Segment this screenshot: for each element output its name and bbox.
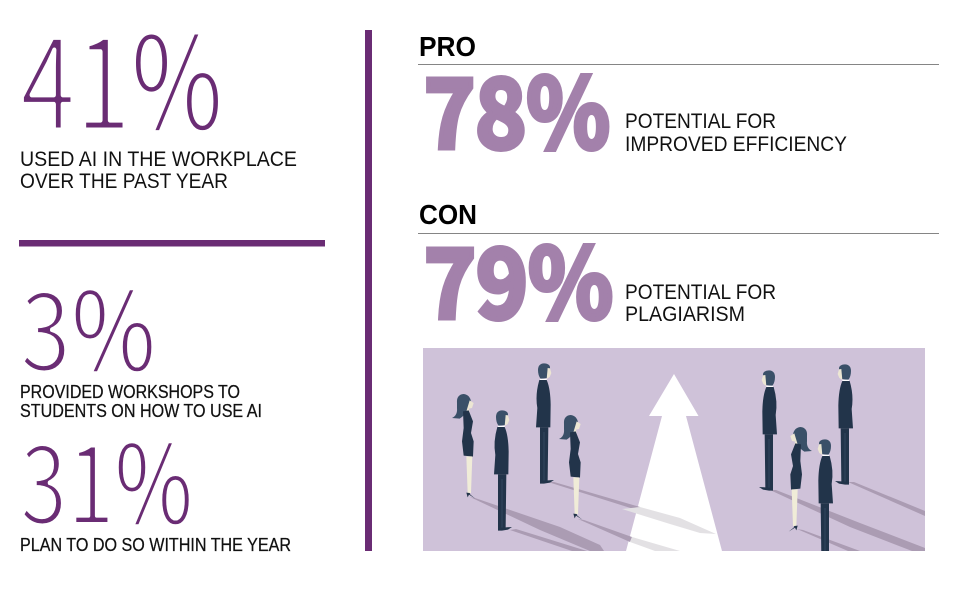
number: 3%: 3% (20, 243, 156, 403)
caption: provided workshops: STUDENTS ON HOW TO USE AI (20, 400, 262, 421)
number: 78%: 78% (424, 37, 610, 176)
vertical divider (365, 30, 372, 551)
panel: con (418, 199, 939, 346)
figure: man facing left (759, 370, 777, 491)
heading: PRO: PRO (419, 31, 476, 62)
stat: 3% provided workshops (20, 243, 262, 421)
panel: pro (418, 31, 939, 176)
figure: man (494, 410, 512, 531)
caption: improved efficiency: IMPROVED EFFICIENCY (625, 133, 847, 156)
caption: provided workshops: PROVIDED WORKSHOPS TO (20, 381, 240, 402)
icon: white arrow (626, 374, 722, 551)
stat: 41% used AI (20, 0, 297, 193)
caption: used AI in the workplace: USED AI IN THE WORKPLACE (20, 148, 297, 171)
caption: plagiarism (625, 281, 776, 326)
shadows (470, 482, 925, 551)
number: 31%: 31% (20, 396, 193, 556)
heading: CON: CON (419, 199, 477, 230)
caption: used AI in the workplace (20, 148, 297, 193)
caption: improved efficiency: POTENTIAL FOR (625, 110, 776, 133)
shadows over arrow (622, 507, 716, 551)
figure: woman (559, 415, 582, 520)
caption: provided workshops (20, 381, 262, 421)
left divider bar (19, 240, 325, 246)
stat: 31% plan to do so (20, 396, 291, 556)
figure: woman facing left (789, 427, 812, 532)
caption: plagiarism: PLAGIARISM (625, 303, 745, 326)
caption: plagiarism: POTENTIAL FOR (625, 281, 776, 304)
number: 79%: 79% (424, 207, 613, 346)
figure: woman (452, 394, 475, 499)
figure: man facing left, cropped (818, 439, 833, 551)
figure: man (536, 363, 554, 484)
caption: used AI in the workplace: OVER THE PAST YEAR (20, 170, 228, 193)
illustration: people and arrow (423, 348, 925, 560)
caption: plan to do so: PLAN TO DO SO WITHIN THE YEAR (20, 534, 291, 555)
figure: man facing left (835, 364, 853, 485)
caption: improved efficiency (625, 110, 847, 156)
